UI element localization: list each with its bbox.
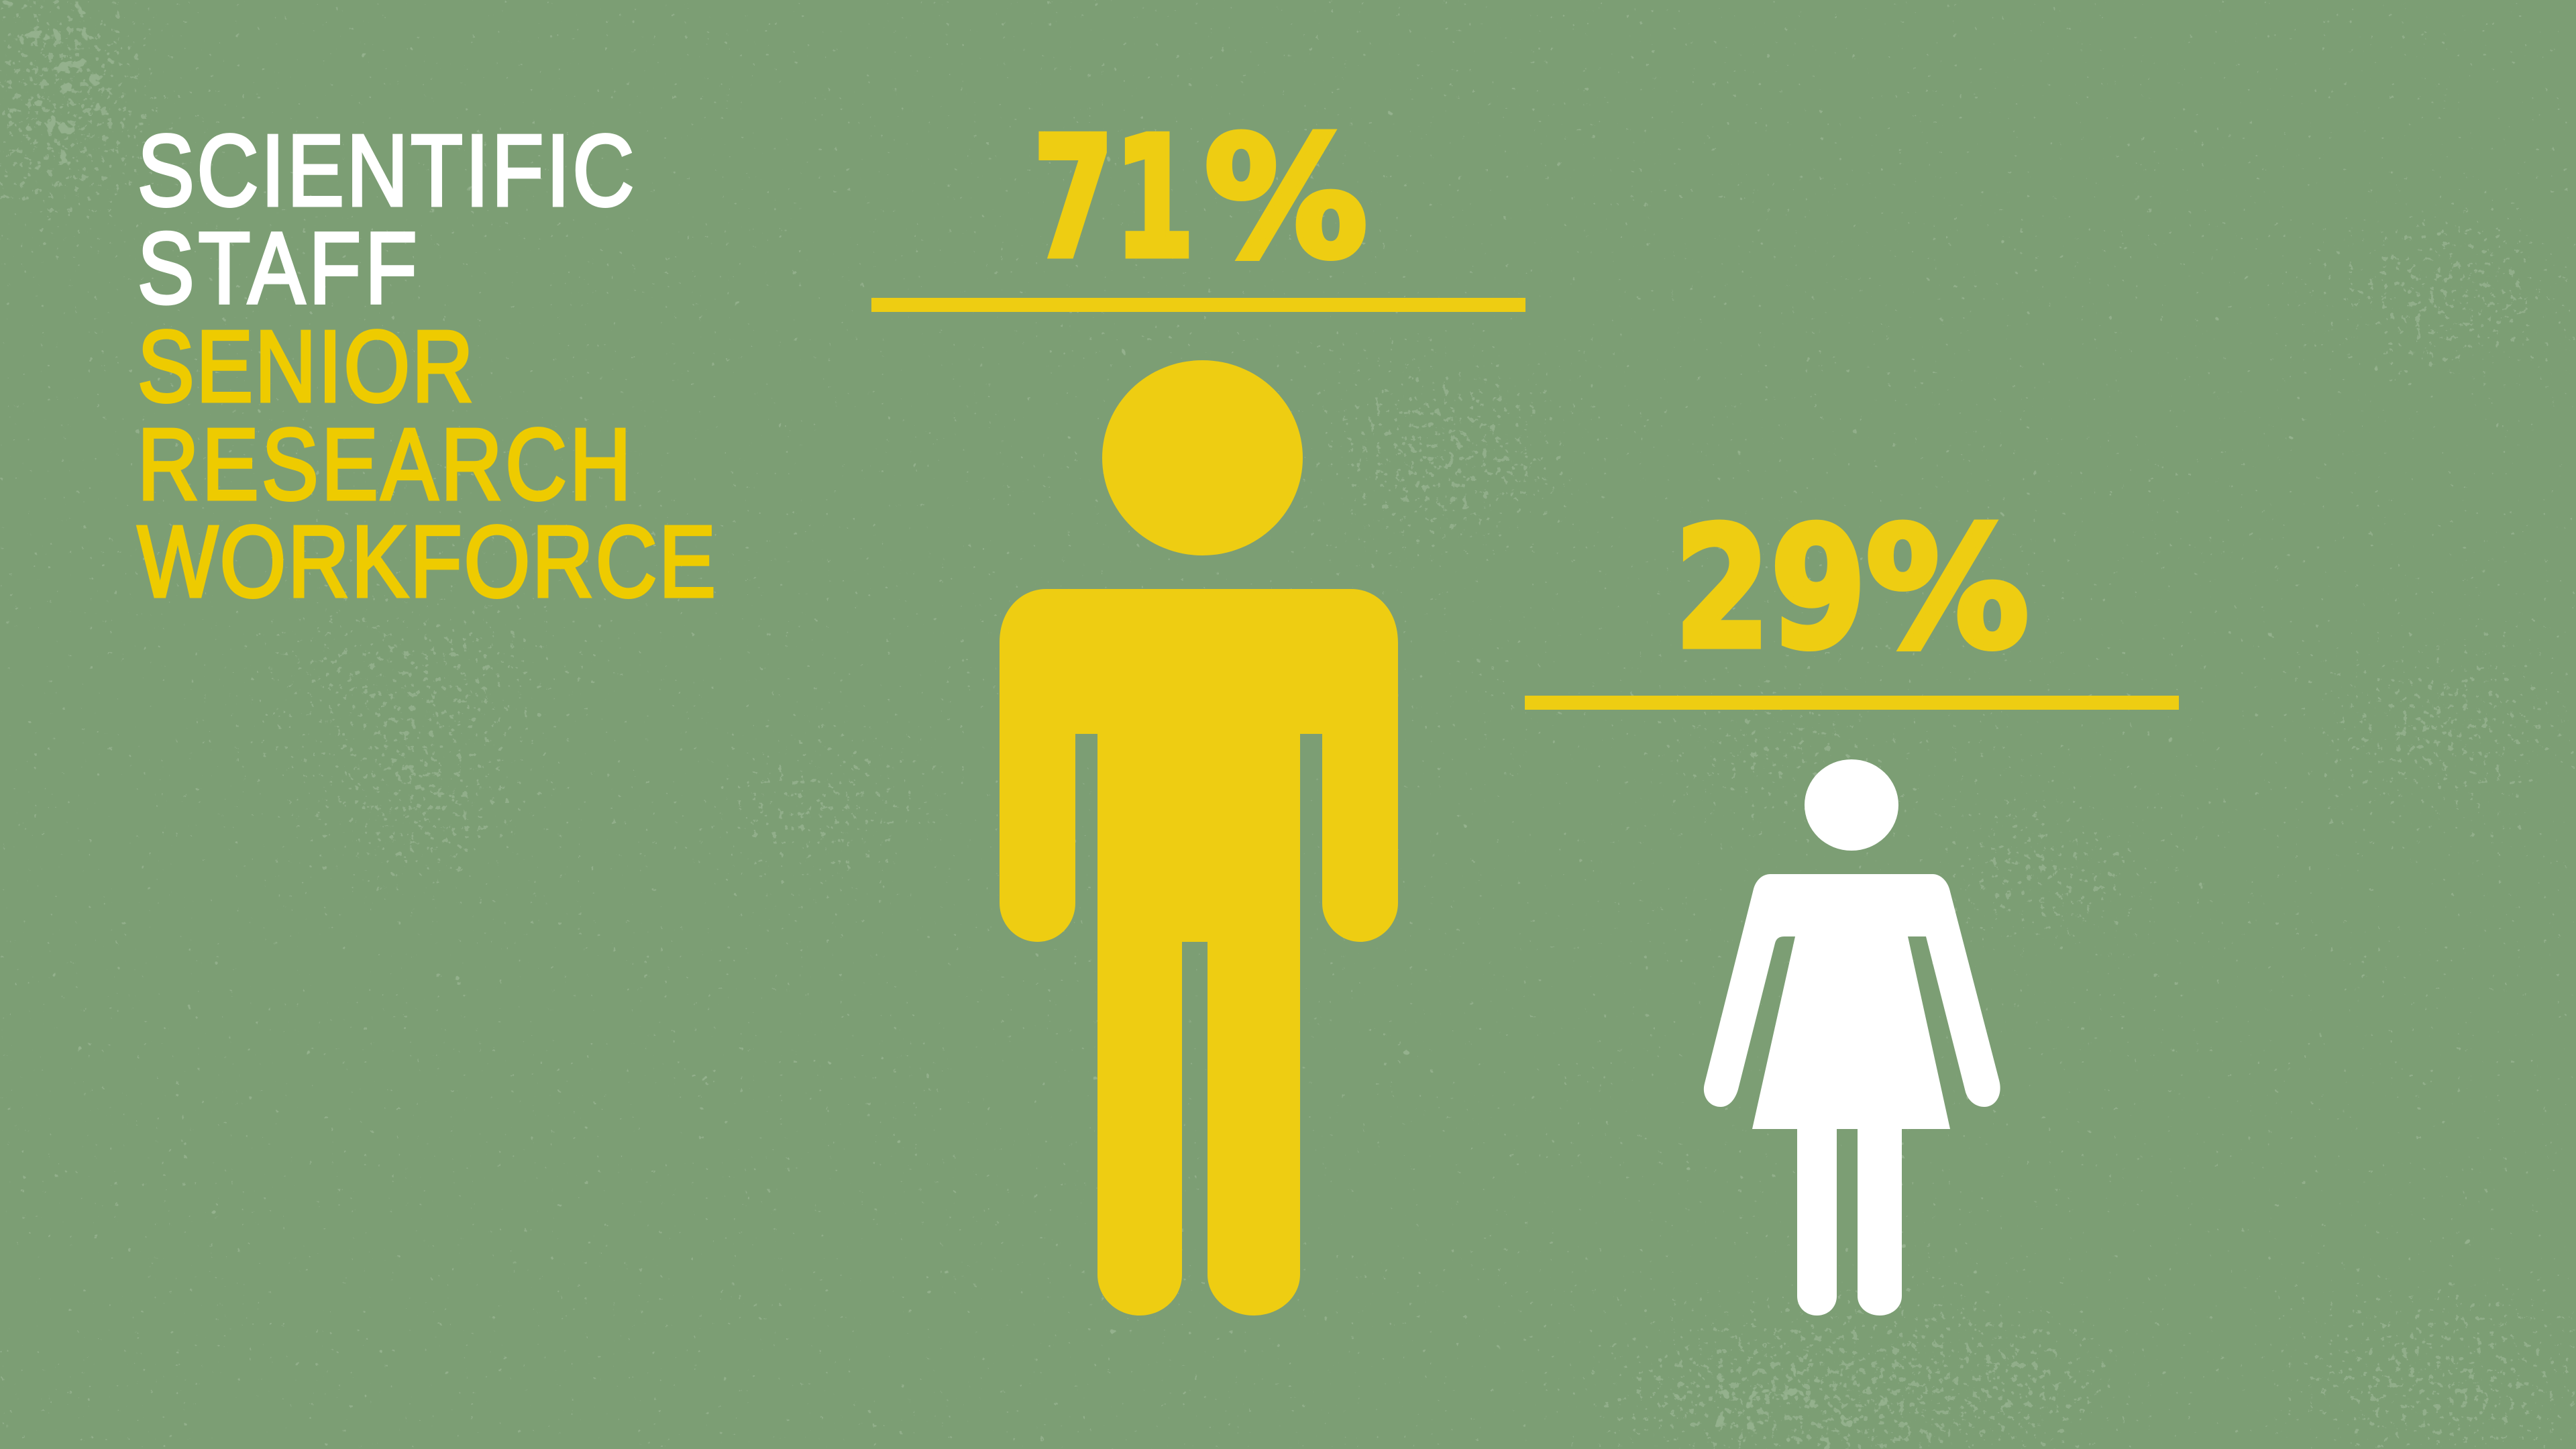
women divider rule (1525, 696, 2179, 710)
men percentage: 71%: 71 (1033, 102, 1195, 295)
women percentage: 29% (1674, 492, 2029, 686)
title line: WORKFORCE: WORKFORCE (138, 505, 716, 618)
men percentage: 71%: % (1204, 102, 1368, 295)
background blotches (0, 0, 1959, 1449)
women percentage: 29%: 29 (1674, 492, 1866, 686)
icon: woman figure (1704, 759, 2000, 1316)
men percentage: 71% (1033, 102, 1368, 295)
women percentage: 29%: % (1866, 492, 2029, 686)
title line: RESEARCH: RESEARCH (138, 408, 631, 521)
title: scientific staff, senior research workforce (138, 114, 716, 618)
men divider rule (871, 298, 1525, 312)
title line: STAFF: STAFF (138, 211, 417, 325)
title line: SCIENTIFIC: SCIENTIFIC (138, 114, 634, 227)
title line: SENIOR: SENIOR (138, 310, 474, 423)
icon: man figure (1000, 360, 1398, 1316)
